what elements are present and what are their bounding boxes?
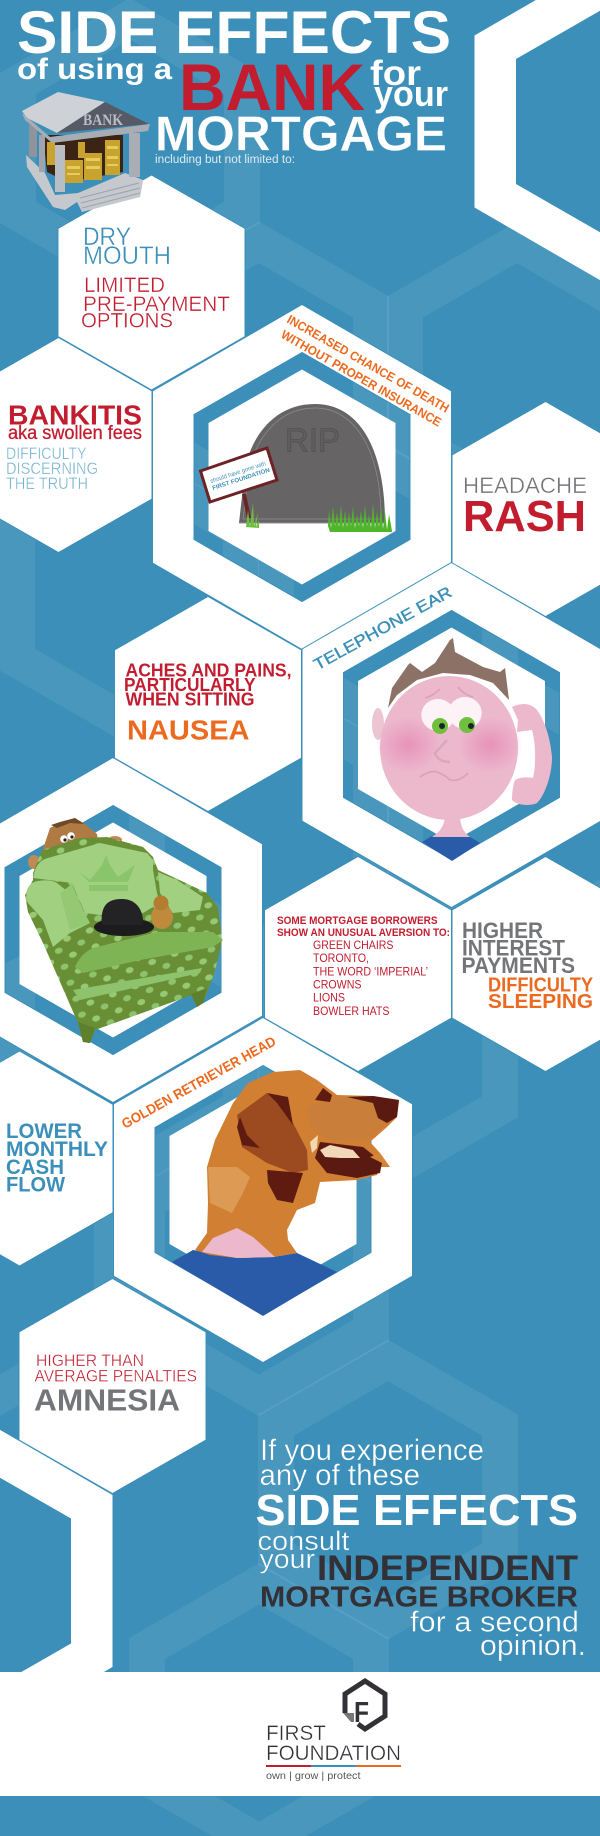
panel: unusual aversions: SOME MORTGAGE BORROWERS bbox=[277, 915, 438, 927]
panel: unusual aversions bbox=[264, 856, 452, 1072]
illustration: green chair with crown, hat and lion bbox=[25, 837, 223, 1043]
panel: lower monthly cash flow: LOWER bbox=[6, 1120, 82, 1143]
panel: bankitis: THE TRUTH bbox=[6, 474, 88, 493]
panel: bankitis: BANKITIS bbox=[8, 400, 142, 430]
call to action: INDEPENDENT bbox=[317, 1549, 578, 1588]
panel: aches and nausea: NAUSEA bbox=[127, 714, 250, 745]
panel: unusual aversions: SHOW AN UNUSUAL AVERSION TO: bbox=[277, 927, 450, 939]
icon: bank building: BANK bbox=[83, 112, 123, 129]
top right hexagon ring bbox=[474, 0, 600, 294]
call to action: any of these bbox=[260, 1459, 420, 1492]
panel: higher interest payments: DIFFICULTY bbox=[488, 975, 594, 997]
panel: aches and nausea: WHEN SITTING bbox=[126, 688, 254, 710]
panel: bankitis: DIFFICULTY bbox=[6, 444, 86, 463]
call to action: SIDE EFFECTS bbox=[256, 1486, 578, 1535]
icon: bank building bbox=[22, 92, 150, 212]
panel: unusual aversions: CROWNS bbox=[313, 977, 362, 991]
caption: telephone ear: TELEPHONE EAR bbox=[311, 584, 455, 674]
title: including but not limited to: bbox=[155, 154, 295, 166]
panel: unusual aversions: TORONTO, bbox=[313, 951, 369, 965]
panel: higher interest payments: SLEEPING bbox=[488, 991, 593, 1013]
logo: First Foundation: own | grow | protect bbox=[266, 1770, 361, 1782]
illustration: pink head with telephone ear bbox=[372, 638, 552, 861]
logo: First Foundation: F bbox=[354, 1697, 369, 1729]
caption: golden retriever head: GOLDEN RETRIEVER HEAD bbox=[119, 1033, 278, 1132]
panel: dry mouth: MOUTH bbox=[83, 242, 171, 270]
panel: dry mouth: PRE-PAYMENT bbox=[83, 293, 230, 316]
footer band bbox=[0, 1672, 600, 1796]
title: your bbox=[374, 73, 448, 114]
call to action: MORTGAGE BROKER bbox=[260, 1582, 578, 1614]
panel: bankitis: DISCERNING bbox=[6, 459, 98, 478]
icon: gravestone: FIRST FOUNDATION bbox=[212, 468, 271, 492]
panel: golden retriever head bbox=[114, 1018, 412, 1362]
title: for bbox=[370, 54, 421, 93]
panel: dry mouth: DRY bbox=[83, 223, 131, 251]
panel: higher interest payments: INTEREST bbox=[462, 936, 566, 961]
panel: lower monthly cash flow: CASH bbox=[6, 1156, 64, 1179]
panel: headache rash: HEADACHE bbox=[463, 473, 587, 498]
title bbox=[17, 0, 451, 166]
panel: telephone ear bbox=[302, 562, 600, 908]
logo: First Foundation: FOUNDATION bbox=[266, 1742, 401, 1765]
logo: First Foundation: FIRST bbox=[266, 1722, 326, 1745]
title: MORTGAGE bbox=[155, 108, 447, 162]
panel: unusual aversions: BOWLER HATS bbox=[313, 1004, 390, 1018]
panel: headache rash: RASH bbox=[463, 492, 586, 541]
caption: increased chance of death: INCREASED CHANCE OF DEATH bbox=[285, 312, 451, 415]
panel: lower monthly cash flow: FLOW bbox=[6, 1174, 65, 1197]
title: SIDE EFFECTS bbox=[17, 0, 451, 66]
title: of using a bbox=[17, 53, 172, 86]
panel: bankitis bbox=[0, 338, 152, 552]
icon: gravestone: RIP bbox=[285, 422, 340, 458]
panel: lower monthly cash flow bbox=[0, 1051, 113, 1266]
panel: amnesia: AVERAGE PENALTIES bbox=[34, 1367, 197, 1386]
panel: higher interest payments: PAYMENTS bbox=[462, 953, 575, 978]
panel: dry mouth: LIMITED bbox=[84, 274, 165, 297]
call to action: opinion. bbox=[480, 1630, 586, 1662]
illustration: person behind chair bbox=[28, 818, 122, 869]
call to action: for a second bbox=[410, 1607, 579, 1639]
panel: green chair bbox=[0, 758, 262, 1102]
logo: First Foundation bbox=[266, 1681, 401, 1782]
illustration: dog head on shirt bbox=[172, 1070, 399, 1316]
panel: increased chance of death bbox=[152, 304, 452, 650]
call to action: If you experience bbox=[260, 1434, 484, 1467]
panel: amnesia: HIGHER THAN bbox=[36, 1351, 144, 1370]
panel: amnesia: AMNESIA bbox=[34, 1383, 180, 1418]
icon: gravestone bbox=[200, 404, 392, 532]
icon: gravestone: should have gone with bbox=[210, 461, 267, 485]
panel: aches and nausea: PARTICULARLY bbox=[124, 674, 256, 695]
panel: higher interest payments: HIGHER bbox=[462, 918, 543, 943]
panel: dry mouth: OPTIONS bbox=[81, 310, 173, 332]
bottom left hexagon ring bbox=[0, 1408, 112, 1754]
caption: increased chance of death: WITHOUT PROPER INSURANCE bbox=[279, 327, 444, 430]
panel: dry mouth bbox=[58, 175, 245, 390]
panel: aches and nausea: ACHES AND PAINS, bbox=[126, 660, 292, 680]
panel: aches and nausea bbox=[114, 596, 302, 812]
title: BANK bbox=[179, 50, 365, 124]
panel: unusual aversions: GREEN CHAIRS bbox=[313, 938, 394, 952]
call to action bbox=[256, 1434, 586, 1662]
panel: unusual aversions: LIONS bbox=[313, 991, 345, 1005]
panel: headache rash bbox=[452, 402, 600, 616]
call to action: consult bbox=[258, 1526, 350, 1556]
panel: amnesia bbox=[19, 1278, 206, 1494]
panel: higher interest payments bbox=[452, 856, 600, 1072]
call to action: your bbox=[260, 1544, 315, 1574]
panel: lower monthly cash flow: MONTHLY bbox=[6, 1138, 108, 1161]
panel: bankitis: aka swollen fees bbox=[8, 423, 142, 444]
panel: unusual aversions: THE WORD ‘IMPERIAL’ bbox=[313, 964, 428, 978]
